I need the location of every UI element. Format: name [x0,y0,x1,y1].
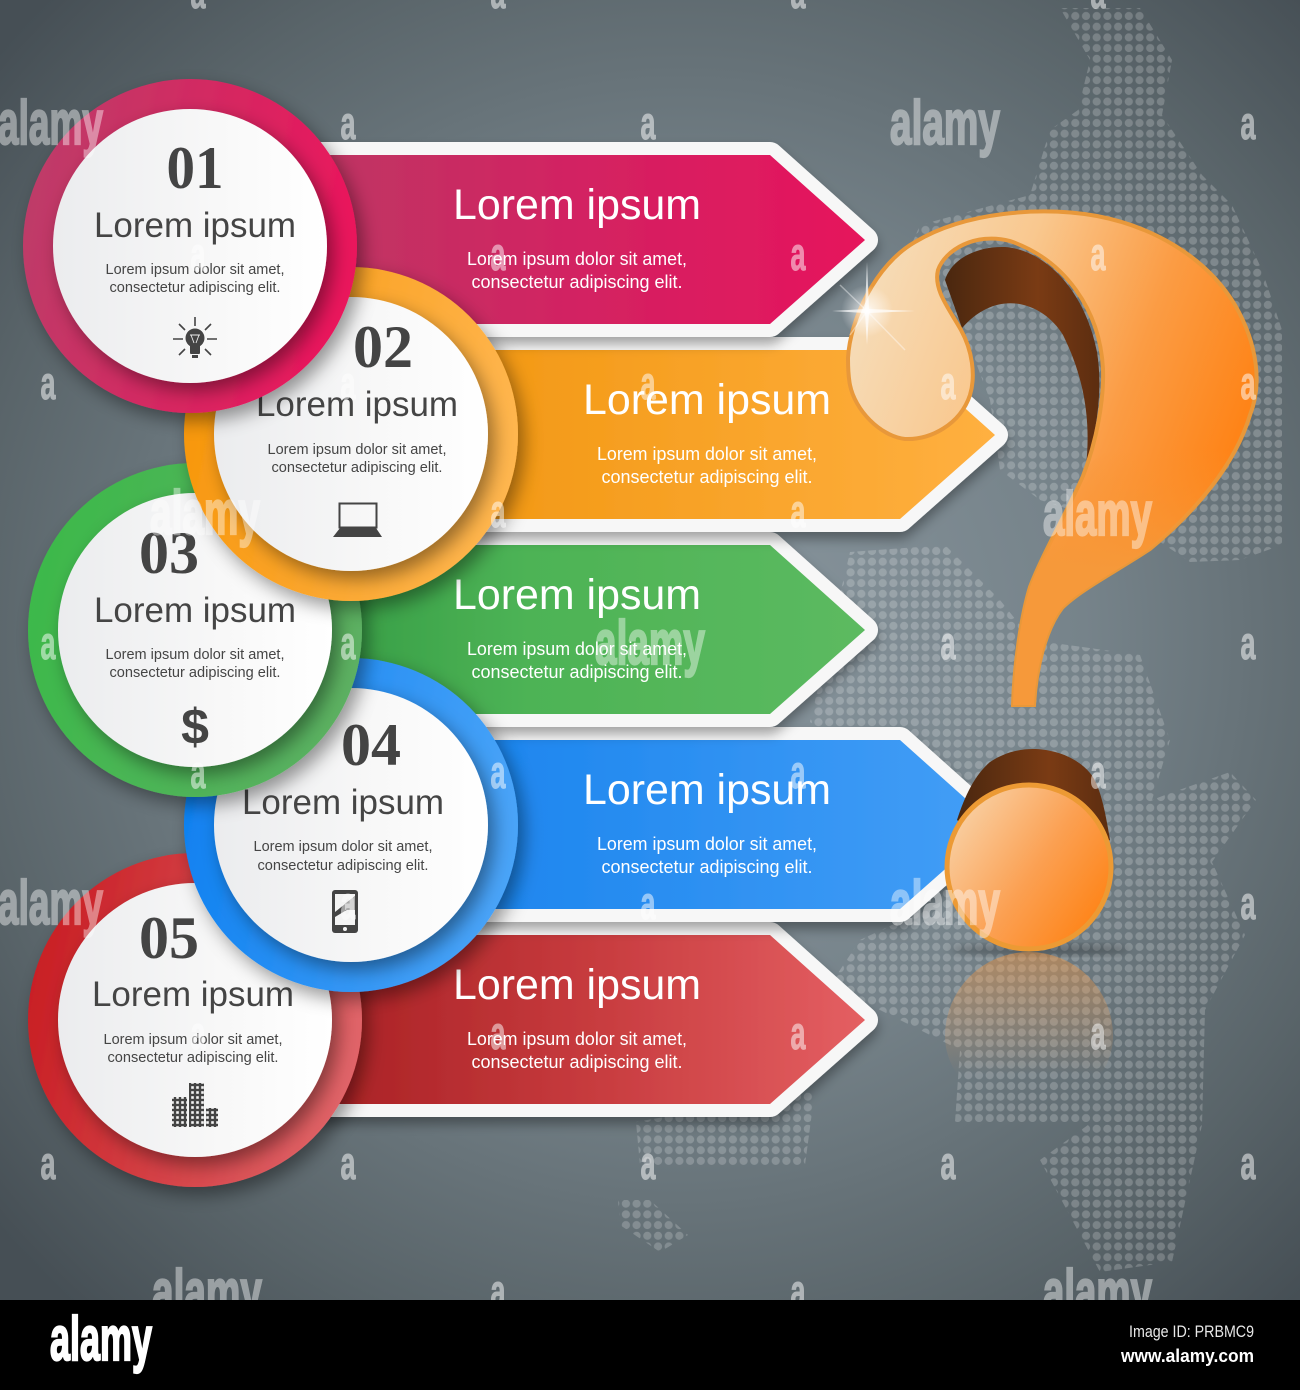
watermarks: a [1240,617,1256,669]
watermarks: a [1240,357,1256,409]
watermarks: alamy [1043,480,1152,549]
icon: light bulb [173,317,217,358]
watermarks: alamy [0,869,103,938]
watermarks: a [1240,877,1256,929]
heading: Lorem ipsum [242,783,444,822]
circle 01 crimson [23,79,357,413]
number: 01 [166,135,224,201]
arrow: 05 red [300,935,865,1104]
icon: smartphone [332,890,358,933]
heading: Lorem ipsum [92,975,294,1014]
watermarks: alamy [890,89,1000,158]
watermarks: a [340,1137,356,1189]
icon: laptop [333,504,382,537]
body text: consectetur adipiscing elit. [472,272,682,292]
body text [254,839,432,874]
watermarks: a [40,1137,56,1189]
body text: Lorem ipsum dolor sit amet, [467,639,687,659]
number: 03 [139,520,199,586]
body text: Lorem ipsum dolor sit amet, [597,834,817,854]
arrow: 03 green [300,545,865,714]
question mark [832,212,1257,956]
watermarks: a [940,1137,956,1189]
watermarks: a [190,228,206,280]
body text [104,1032,282,1066]
watermarks: a [790,1265,806,1317]
icon: buildings [172,1083,218,1127]
body text: Lorem ipsum dolor sit amet, [106,262,284,278]
body text: consectetur adipiscing elit. [110,280,280,296]
body text: Lorem ipsum dolor sit amet, [106,647,284,663]
watermarks: a [1090,1007,1106,1059]
dot face [947,785,1111,949]
lower tail shading [1013,440,1240,705]
watermarks: a [640,1137,656,1189]
watermarks: a [490,1265,506,1317]
watermarks: alamy [595,609,705,678]
arrow: 01 crimson [300,155,865,324]
heading: Lorem ipsum [453,181,701,229]
watermarks: a [40,617,56,669]
body text [106,647,284,681]
body text: consectetur adipiscing elit. [258,858,428,874]
image id: Image ID: PRBMC9 [1129,1322,1254,1341]
watermarks: a [1090,746,1106,798]
heading: Lorem ipsum [453,571,701,619]
footer logo: alamy [50,1305,152,1374]
watermarks: a [490,485,506,537]
watermarks: a [490,746,506,798]
watermarks: alamy [890,869,1000,938]
watermarks: a [640,877,656,929]
body text [106,262,284,296]
watermarks: alamy [0,89,103,158]
heading: Lorem ipsum [583,376,831,424]
heading: Lorem ipsum [583,766,831,814]
watermarks: a [340,617,356,669]
body text: Lorem ipsum dolor sit amet, [467,1029,687,1049]
heading: Lorem ipsum [453,961,701,1009]
watermarks: a [340,357,356,409]
watermarks: alamy [150,479,260,548]
body text: consectetur adipiscing elit. [472,662,682,682]
body text: Lorem ipsum dolor sit amet, [104,1032,282,1048]
watermarks: a [790,485,806,537]
watermarks: a [340,877,356,929]
body text: Lorem ipsum dolor sit amet, [597,444,817,464]
body text: consectetur adipiscing elit. [108,1050,278,1066]
heading: Lorem ipsum [94,591,296,630]
body text: consectetur adipiscing elit. [110,665,280,681]
watermarks: a [1240,1137,1256,1189]
body text: Lorem ipsum dolor sit amet, [467,249,687,269]
body text [268,442,446,476]
watermarks: a [790,746,806,798]
watermarks: a [640,357,656,409]
icon: dollar: $ [181,699,209,755]
watermarks: a [790,228,806,280]
body text: consectetur adipiscing elit. [602,857,812,877]
circle 03 green [28,463,362,797]
body text [597,834,817,877]
watermarks: a [40,357,56,409]
watermarks: alamy [1043,1258,1152,1327]
body text: Lorem ipsum dolor sit amet, [254,839,432,855]
body text: consectetur adipiscing elit. [272,460,442,476]
footer bar [0,1300,1300,1390]
watermarks: a [190,746,206,798]
website: www.alamy.com [1120,1346,1254,1366]
watermarks: a [940,617,956,669]
circle 04 blue [184,658,518,992]
heading: Lorem ipsum [256,385,458,424]
arrow: 04 blue [450,740,995,909]
body text [597,444,817,487]
watermarks: alamy [152,1258,262,1327]
watermarks: a [190,1007,206,1059]
watermarks: a [1090,228,1106,280]
question mark body [848,212,1257,705]
number: 04 [341,712,401,778]
body text: consectetur adipiscing elit. [472,1052,682,1072]
reflection [945,952,1113,1075]
dotted world map [618,8,1282,1272]
body text: consectetur adipiscing elit. [602,467,812,487]
circle 05 red [28,853,362,1187]
question mark dot [945,749,1113,1075]
body text [467,639,687,682]
watermarks: a [490,1007,506,1059]
watermarks: a [640,97,656,149]
number: 05 [139,905,199,971]
circle 02 orange [184,267,518,601]
arrow: 02 orange [450,350,995,519]
body text [467,1029,687,1072]
watermarks: a [340,97,356,149]
watermarks: a [490,228,506,280]
body text [467,249,687,292]
watermarks: a [790,1007,806,1059]
watermarks: a [1240,97,1256,149]
dot back [957,749,1110,880]
sparkle [832,262,915,350]
watermarks: a [940,357,956,409]
body text: Lorem ipsum dolor sit amet, [268,442,446,458]
heading: Lorem ipsum [94,206,296,245]
number: 02 [353,314,413,380]
floor shadow [950,944,1130,956]
hook inner shadow [945,247,1099,466]
